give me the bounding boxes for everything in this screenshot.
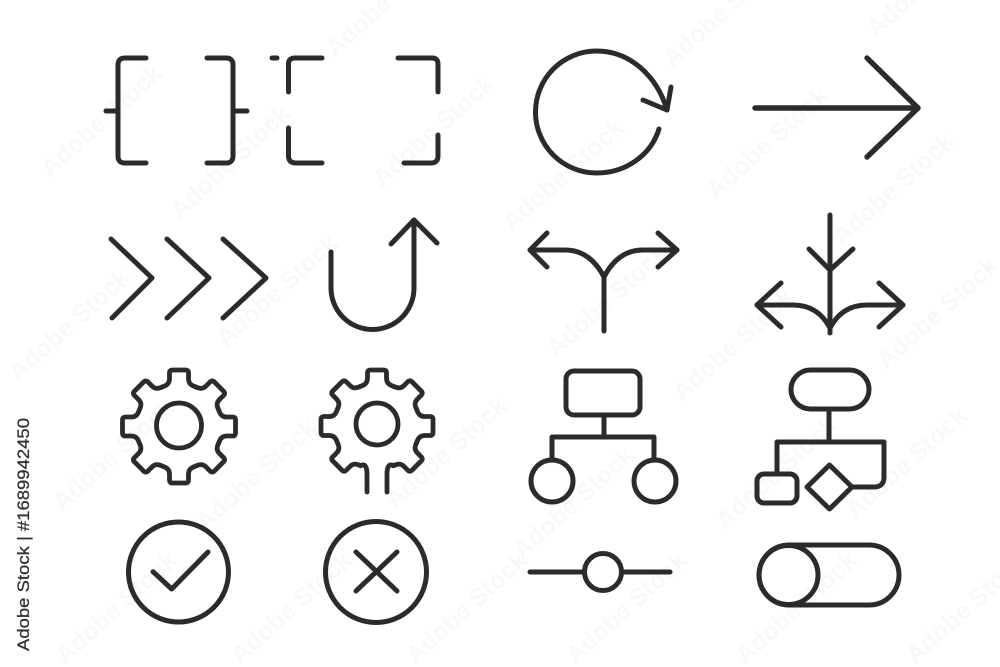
watermark pattern: Adobe Stock [497,113,630,236]
icon: U-turn arrow [331,220,437,330]
watermark pattern: Adobe Stock [701,81,834,204]
icon: gear [122,370,236,483]
icon: long right arrow [755,58,918,157]
watermark pattern: Adobe Stock [380,391,513,514]
icon: split two-way arrow [530,233,677,331]
watermark pattern: Adobe Stock [710,411,843,534]
icon: triple chevrons [111,239,266,318]
watermark pattern: Adobe Stock [507,441,640,564]
watermark pattern: Adobe Stock [47,393,180,516]
watermark pattern: Adobe Stock [50,546,183,667]
icon: brackets with side ticks [106,58,247,163]
all icons [106,51,918,622]
icon: toggle switch [759,545,899,605]
watermark pattern: Adobe Stock [400,546,533,667]
icon: slider [530,554,670,590]
watermark pattern: Adobe Stock [225,546,358,667]
watermark pattern: Adobe Stock [840,401,973,524]
icon: gear with open stem [321,370,433,492]
watermark pattern: Adobe Stock [730,546,863,667]
watermark pattern: Adobe Stock [3,263,136,386]
icon: cross in circle [326,522,426,622]
icon: circular refresh arrow [536,51,671,173]
watermark pattern: Adobe Stock [541,239,674,362]
watermark pattern: Adobe Stock [871,251,1000,374]
icon: hierarchy with two circles [531,371,676,502]
icon: check in circle [128,522,228,622]
watermark pattern: Adobe Stock [35,59,168,182]
watermark pattern: Adobe Stock [560,546,693,667]
icon: corner frame [272,58,438,163]
stock credit text: Adobe Stock | #1689942450 [14,418,33,651]
watermark pattern: Adobe Stock [827,127,960,250]
icon: merge and split arrows [757,215,903,333]
watermark pattern: Adobe Stock [190,413,323,536]
watermark pattern: Adobe Stock [367,69,500,192]
watermark pattern: Adobe Stock [165,100,296,224]
icon: flowchart [757,370,884,509]
watermark pattern: Adobe Stock [667,283,800,406]
watermark pattern: Adobe Stock [211,229,344,352]
